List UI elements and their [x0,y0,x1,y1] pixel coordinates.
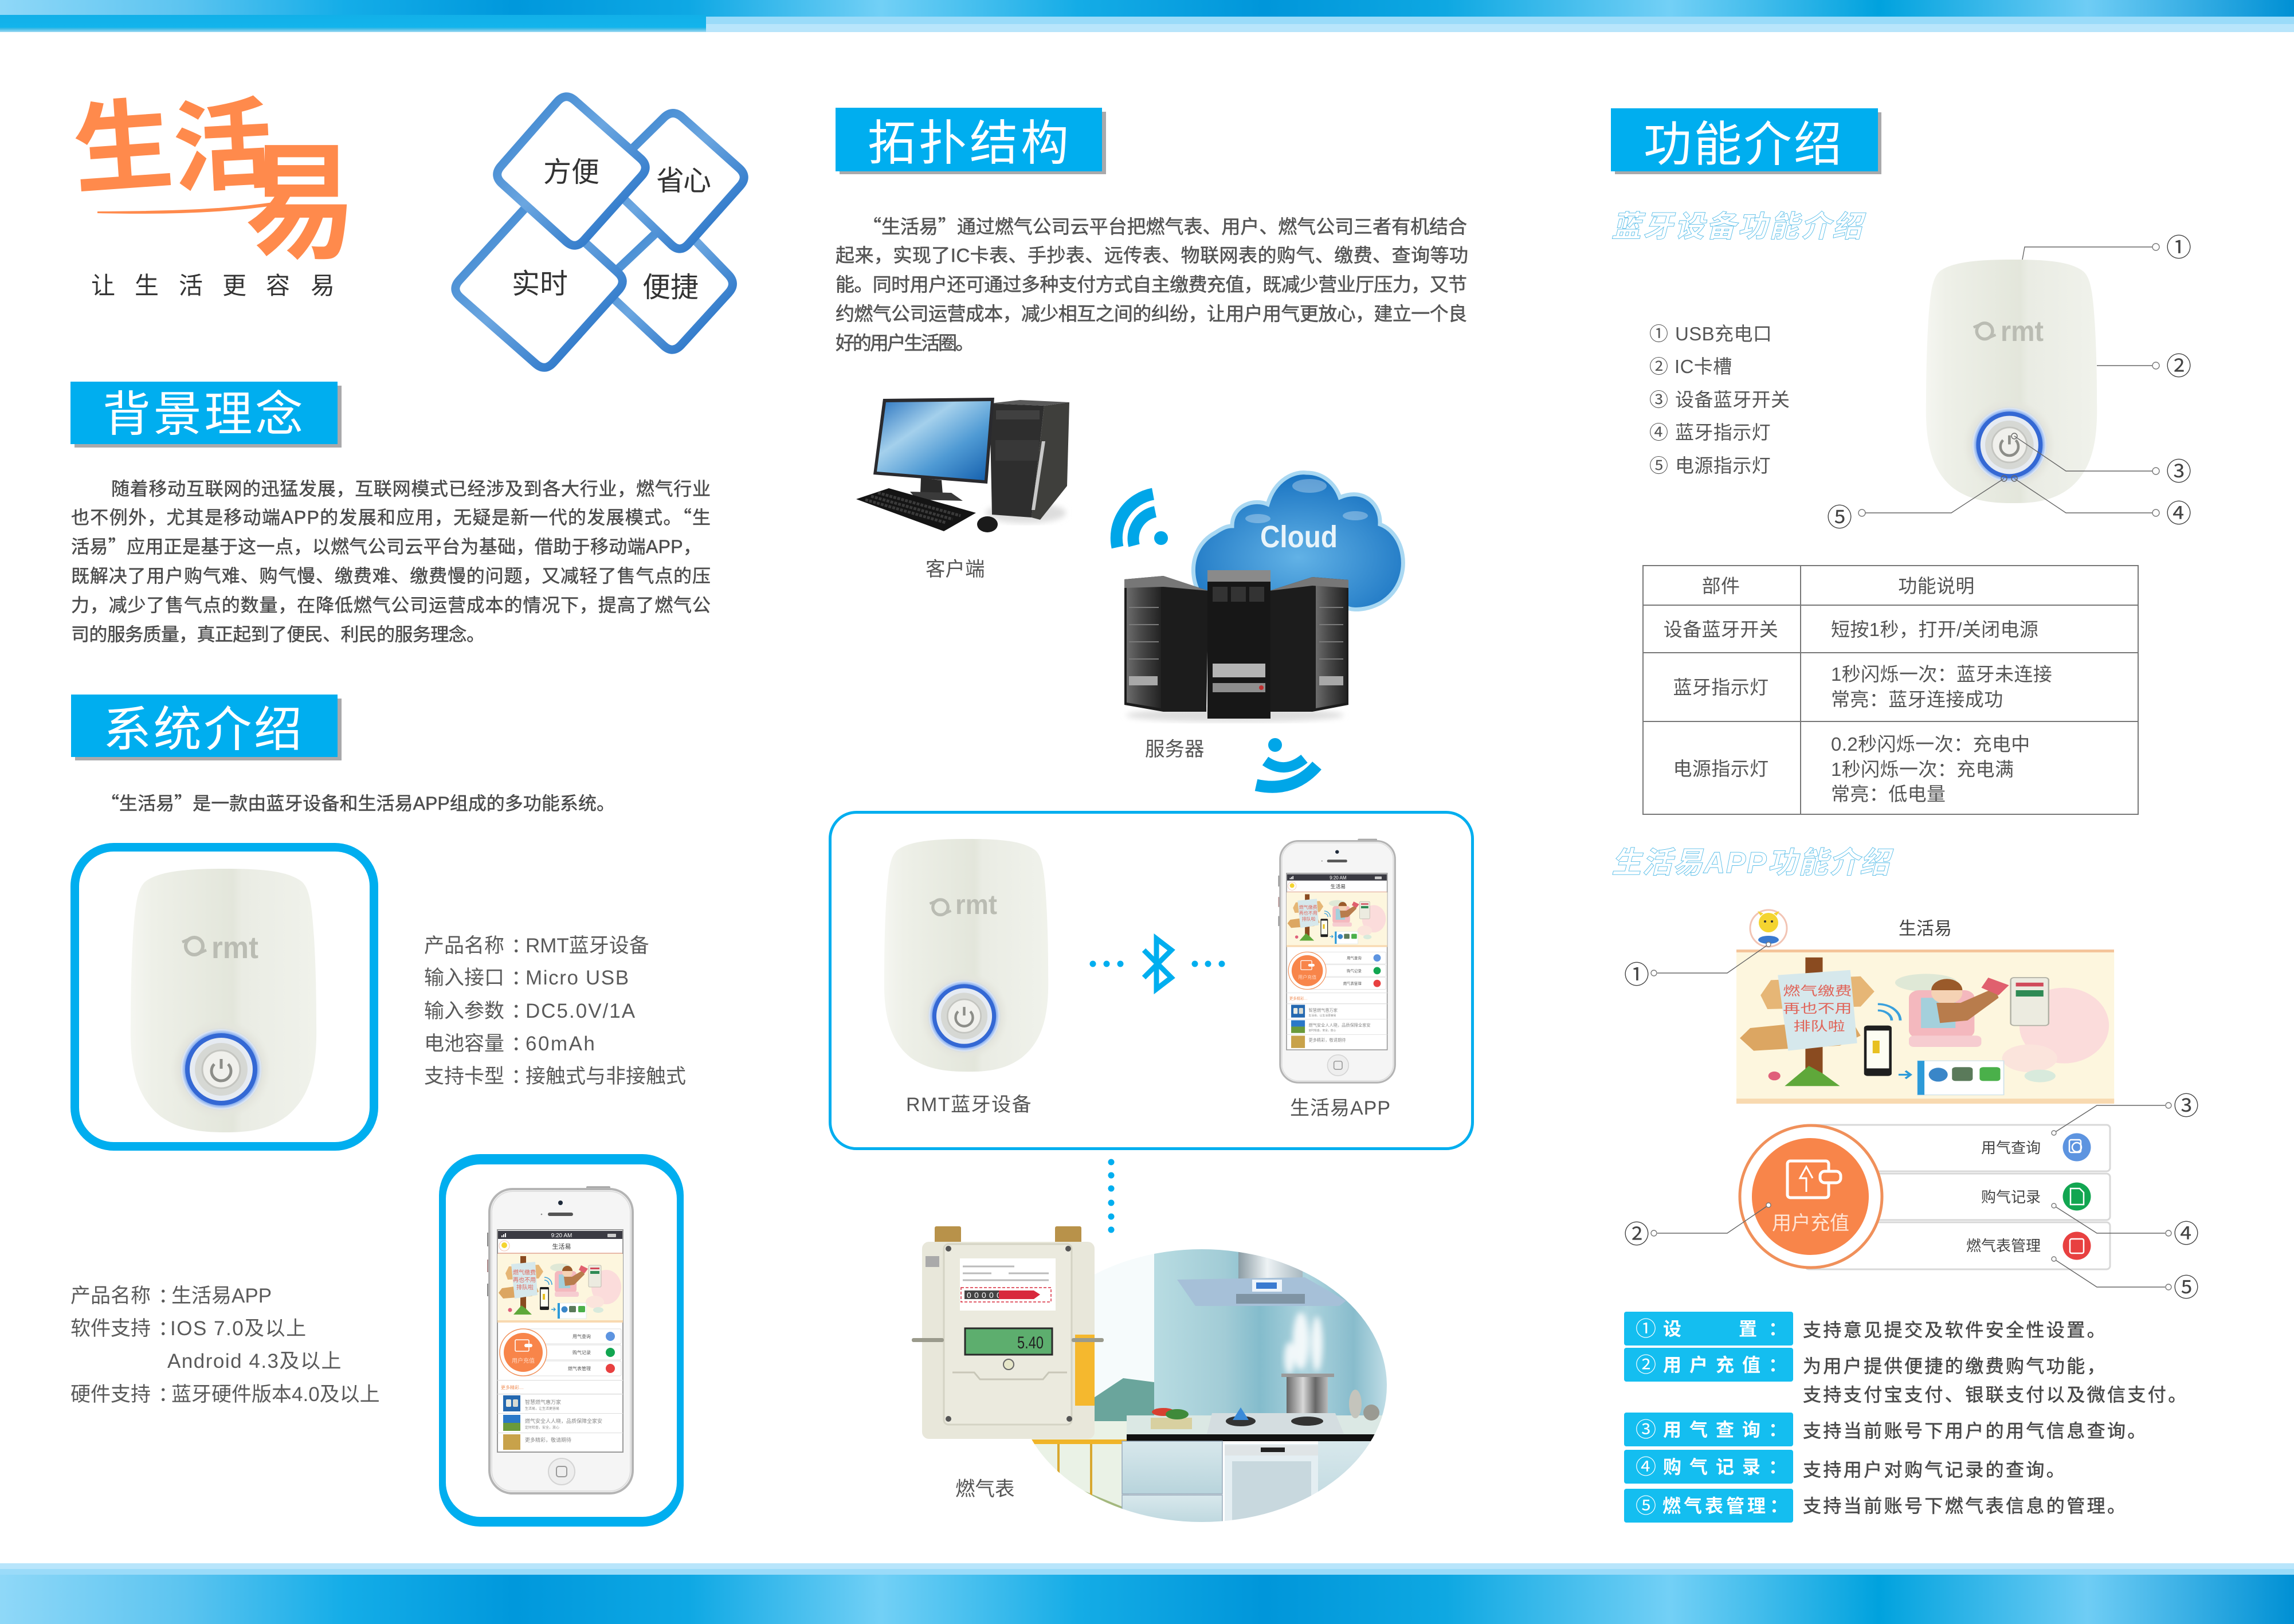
parts function table: 常亮：低电量 [1831,783,1946,805]
parts function table: 常亮：蓝牙连接成功 [1831,689,2003,710]
phone illustration: 更多精彩… [1289,996,1308,1001]
text block: topology [836,211,1468,354]
text block: topology: 能。同时用户还可通过多种支付方式自主缴费充值，既减少营业厅压力，又节 [836,274,1467,295]
card: phone app: 燃气安全人人晓，品质保障全家安 [525,1418,602,1424]
parts list: ① [1649,323,1668,344]
card: phone app: 更多精彩，敬请期待 [525,1437,571,1443]
app menu with callouts: 购气记录 [1981,1188,2041,1206]
bottom gradient band [0,1563,2294,1624]
brand logo: 生 [70,90,176,206]
text block: background concept: 随着移动互联网的迅猛发展，互联网模式已经涉及到各大行业，燃气行业 [111,478,711,499]
card: phone app: 生活易 [552,1242,571,1250]
connection: dots and bluetooth icon [1090,939,1225,989]
card: phone app: 购气记录 [572,1350,591,1355]
feature legend: gas query: ③ [1636,1418,1656,1441]
keyword diamonds: 省心 [656,166,711,197]
feature legend: settings: ① [1636,1317,1656,1340]
phone illustration: 排队啦 [1302,916,1316,922]
text block: background concept: 司的服务质量，真正起到了便民、利民的服务理念。 [71,624,485,645]
feature legend: purchase records: 购气记录： [1663,1457,1787,1477]
spec list: app [70,1285,380,1406]
servers [1124,570,1348,722]
label: app: 生活易APP [1290,1097,1391,1119]
phone illustration: 智慧燃气惠万家 [1309,1007,1338,1013]
feature legend: meter management: 燃气表管理： [1662,1496,1788,1516]
parts list: IC卡槽 [1675,356,1732,377]
feature legend: meter management: ⑤ [1636,1494,1656,1517]
spec list: app: ： [158,1383,178,1406]
text block: topology: 约燃气公司运营成本，减少相互之间的纠纷，让用户用气更放心，建立一个良 [836,303,1467,324]
spec list: bluetooth device: Micro USB [526,967,630,989]
device illustration [884,839,1048,1072]
feature legend: recharge: 为用户提供便捷的缴费购气功能， [1803,1356,2107,1376]
parts function table: 短按1秒，打开/关闭电源 [1831,619,2038,640]
subheading: app features: 生活易APP功能介绍 [1611,846,1894,880]
spec list: bluetooth device: ： [511,967,531,989]
app menu with callouts: ① [1624,961,1649,989]
phone illustration: 9:20 AM [1330,875,1347,880]
app screenshot: 再也不用 [1783,1002,1852,1016]
spec list: bluetooth device: ： [511,935,531,957]
feature legend: meter management [1624,1489,2127,1523]
feature legend: gas query: 支持当前账号下用户的用气信息查询。 [1803,1421,2148,1441]
card: phone app: 9:20 AM [551,1233,572,1239]
spec list: bluetooth device: 输入接口 [424,967,504,989]
phone illustration: 定时检查，安全，放心 [1309,1029,1336,1032]
parts function table: 功能说明 [1898,575,1975,597]
spec list: app: 软件支持 [70,1317,151,1340]
feature legend: settings: 支持意见提交及软件安全性设置。 [1803,1320,2107,1340]
brand logo: 易 [245,134,356,275]
feature legend: recharge [1624,1348,2189,1405]
feature legend: settings: 设置： [1663,1319,1787,1339]
icon: wifi signal right [1256,738,1317,787]
feature legend: meter management: 支持当前账号下燃气表信息的管理。 [1803,1496,2127,1516]
app menu with callouts: 燃气表管理 [1966,1237,2041,1254]
label: gas meter: 燃气表 [955,1478,1014,1500]
keyword diamonds: 方便 [543,157,599,188]
heading: background concept [70,382,342,448]
device with callouts: ③ [2166,458,2191,486]
phone illustration: 购气记录 [1347,968,1362,973]
subheading: bluetooth device features: 蓝牙设备功能介绍 [1611,210,1866,244]
spec list: bluetooth device: ： [511,1000,531,1022]
brand tagline: 让生活更容易 [91,272,335,299]
card: phone app: 燃气缴费 [513,1269,536,1276]
spec list: app: ： [158,1285,178,1307]
app menu with callouts: ④ [2174,1220,2199,1248]
card: phone app: 再也不用 [513,1276,536,1284]
parts list: 蓝牙指示灯 [1675,422,1771,443]
device illustration: rmt [955,890,997,920]
phone illustration: 燃气缴费 [1299,904,1317,910]
app menu with callouts [1624,942,2199,1302]
spec list: app: ： [158,1317,178,1340]
spec list: bluetooth device: 60mAh [526,1033,596,1055]
phone illustration: 用气查询 [1347,955,1362,960]
panel: device and app connection [830,813,1473,1148]
parts function table: 1秒闪烁一次：蓝牙未连接 [1831,664,2052,685]
gas meter: 5.40 [1017,1333,1044,1352]
label: server: 服务器 [1145,739,1205,760]
label: client: 客户端 [926,559,985,580]
spec list: app: Android 4.3及以上 [167,1350,342,1372]
parts function table: 设备蓝牙开关 [1664,619,1778,640]
app menu with callouts: ② [1624,1221,1649,1249]
gas meter: 00000 [967,1290,1001,1300]
phone illustration: 再也不用 [1299,910,1317,916]
feature legend: gas query [1624,1413,2148,1446]
feature legend: settings [1624,1312,2107,1346]
feature legend: purchase records: 支持用户对购气记录的查询。 [1803,1460,2066,1480]
phone illustration: 用户充值 [1298,974,1316,980]
heading: features [1611,108,1881,174]
card: phone app: 定时检查，安全，放心 [525,1425,559,1430]
keyword diamonds [456,97,744,367]
spec list: app: 产品名称 [70,1285,151,1307]
feature legend: purchase records [1624,1450,2066,1484]
parts function table: 蓝牙指示灯 [1673,677,1768,698]
phone illustration: 燃气安全人人晓，品质保障全家安 [1309,1023,1371,1028]
text block: topology: “生活易”通过燃气公司云平台把燃气表、用户、燃气公司三者有机结合 [862,211,1467,239]
text block: background concept: 活易”应用正是基于这一点，以燃气公司云平台为基础，借助于移动端APP， [71,532,701,559]
spec list: bluetooth device: RMT蓝牙设备 [526,935,649,957]
feature legend: recharge: ② [1636,1353,1656,1376]
cloud [1193,473,1403,609]
card: bluetooth device: rmt [211,931,258,965]
device with callouts: rmt [2001,315,2044,347]
label: device: RMT蓝牙设备 [906,1094,1032,1116]
feature legend: gas query: 用气查询： [1663,1419,1787,1440]
app menu with callouts: 用气查询 [1981,1139,2041,1156]
feature legend: recharge: 支持支付宝支付、银联支付以及微信支付。 [1803,1384,2189,1405]
heading: system intro: 系统介绍 [103,703,302,756]
device with callouts: ⑤ [1827,504,1852,532]
app screenshot [1736,908,2114,1104]
parts list: ④ [1649,422,1668,443]
card: phone app: 更多精彩… [501,1384,524,1390]
client computer [856,398,1069,532]
gas meter [912,1226,1104,1439]
text block: topology: 起来，实现了IC卡表、手抄表、远传表、物联网表的购气、缴费、查询等功 [836,245,1468,266]
card: phone app: 生活易，让生活更容易 [525,1406,559,1411]
spec list: app: 蓝牙硬件版本4.0及以上 [171,1383,380,1406]
card: phone app: 排队啦 [516,1284,534,1291]
card: phone app: 用气查询 [572,1333,591,1339]
text block: background concept: 既解决了用户购气难、购气慢、缴费难、缴费慢的问题，又减轻了售气点的压 [71,566,711,586]
parts function table: 电源指示灯 [1673,758,1768,779]
spec list: bluetooth device: 产品名称 [424,935,504,957]
text block: background concept: 也不例外，尤其是移动端APP的发展和应用，无疑是新一代的发展模式。“生 [71,503,711,529]
keyword diamonds: 实时 [512,269,568,300]
spec list: bluetooth device: 支持卡型 [424,1065,504,1088]
spec list: app: IOS 7.0及以上 [170,1317,307,1340]
phone illustration: 生活易 [1331,883,1346,889]
text block: background concept [71,478,711,645]
heading: system intro [71,695,342,760]
text block: topology: 好的用户生活圈。 [836,332,974,354]
app screenshot: 燃气缴费 [1783,984,1852,998]
spec list: app: 生活易APP [171,1285,272,1307]
phone illustration: 燃气表管理 [1343,981,1362,986]
kitchen scene [1032,1249,1387,1522]
spec list: bluetooth device [424,935,686,1088]
heading: topology [836,108,1106,174]
cloud: Cloud [1260,520,1338,554]
card: phone app: 智慧燃气惠万家 [525,1399,561,1405]
phone illustration: 更多精彩，敬请期待 [1309,1038,1346,1043]
spec list: app: 硬件支持 [70,1383,151,1406]
heading: background concept: 背景理念 [103,387,303,441]
spec list: bluetooth device: DC5.0V/1A [526,1000,636,1022]
device with callouts [1827,234,2191,532]
device with callouts: ② [2166,352,2191,380]
connector dots [1108,1159,1114,1233]
text block: background concept: 力，减少了售气点的数量，在降低燃气公司运营成本的情况下，提高了燃气公 [71,595,711,615]
app menu with callouts: 用户充值 [1772,1213,1849,1234]
feature legend: purchase records: ④ [1636,1455,1656,1478]
brand logo [70,90,356,275]
parts list: 电源指示灯 [1675,455,1771,476]
app screenshot: 排队啦 [1793,1019,1845,1033]
text block: system intro: “生活易”是一款由蓝牙设备和生活易APP组成的多功能系统。 [101,789,615,815]
spec list: bluetooth device: ： [511,1033,531,1055]
card: bluetooth device [74,847,374,1146]
card: phone app: 燃气表管理 [568,1366,591,1371]
feature legend: recharge: 用户充值： [1663,1355,1787,1375]
heading: features: 功能介绍 [1644,117,1842,171]
parts function table: 部件 [1702,575,1740,597]
spec list: bluetooth device: 接触式与非接触式 [526,1065,686,1088]
parts function table: 1秒闪烁一次：充电满 [1831,759,2014,780]
app menu with callouts: ⑤ [2174,1274,2199,1302]
parts function table [1643,566,2138,814]
brand logo: 活 [170,90,275,205]
spec list: bluetooth device: ： [511,1065,531,1088]
app screenshot: 生活易 [1899,919,1952,939]
parts list [1649,323,1790,476]
device with callouts: ① [2166,234,2191,262]
device with callouts: ④ [2166,500,2191,528]
card: phone app [439,1154,684,1527]
parts list: ② [1649,356,1668,377]
spec list: bluetooth device: 电池容量 [424,1033,504,1055]
phone illustration: 生活易，让生活更容易 [1309,1013,1336,1017]
icon: wifi signal left [1116,494,1168,547]
parts list: ⑤ [1649,455,1668,476]
keyword diamonds: 便捷 [642,272,699,303]
parts list: ③ [1649,389,1668,410]
app menu with callouts: ③ [2174,1092,2199,1120]
phone illustration [1279,839,1395,1082]
parts list: 设备蓝牙开关 [1675,389,1790,410]
card: phone app: 用户充值 [512,1357,535,1364]
parts function table: 0.2秒闪烁一次：充电中 [1831,733,2030,755]
spec list: bluetooth device: 输入参数 [424,1000,504,1022]
parts list: USB充电口 [1675,323,1772,344]
heading: topology: 拓扑结构 [868,116,1069,170]
top gradient band [0,0,2294,32]
